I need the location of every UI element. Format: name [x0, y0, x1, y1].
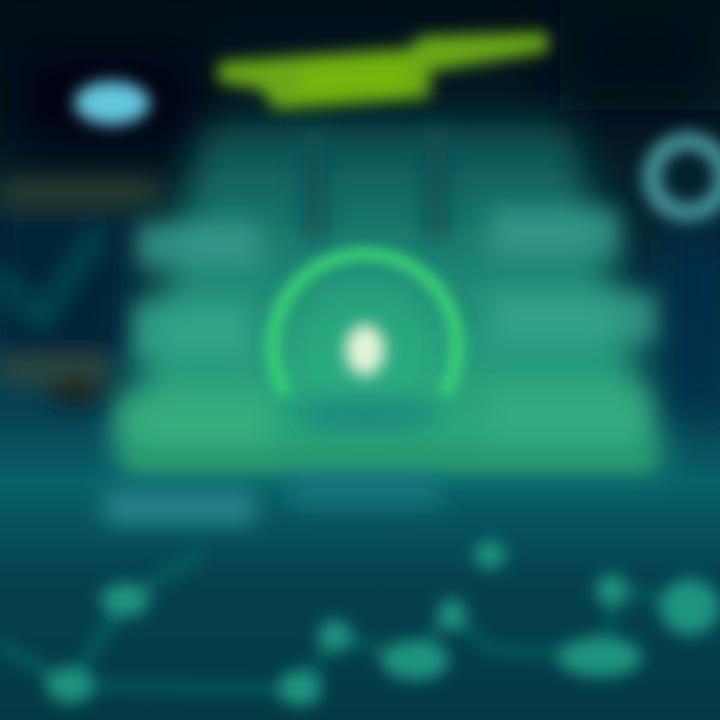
gauge: lower band	[290, 397, 440, 433]
line chart: bottom green blobs	[0, 541, 720, 706]
heading: green title bar	[218, 32, 548, 110]
gauge: bright centre	[345, 324, 385, 376]
left side dark panel	[0, 180, 160, 403]
dark top corners	[10, 0, 720, 150]
right side dark panel	[675, 240, 720, 410]
panel: left column rows	[115, 222, 270, 447]
gauge: glow disc	[290, 270, 440, 420]
panel: central glowing trapezoid	[115, 125, 665, 465]
lower text block	[105, 478, 440, 524]
panel: right column rows	[490, 208, 660, 444]
column dividers	[303, 130, 447, 240]
icon: ring top right	[652, 141, 720, 213]
icon: blue ellipse	[74, 81, 150, 125]
gauge: arc	[273, 254, 457, 395]
baseline band	[125, 450, 655, 470]
